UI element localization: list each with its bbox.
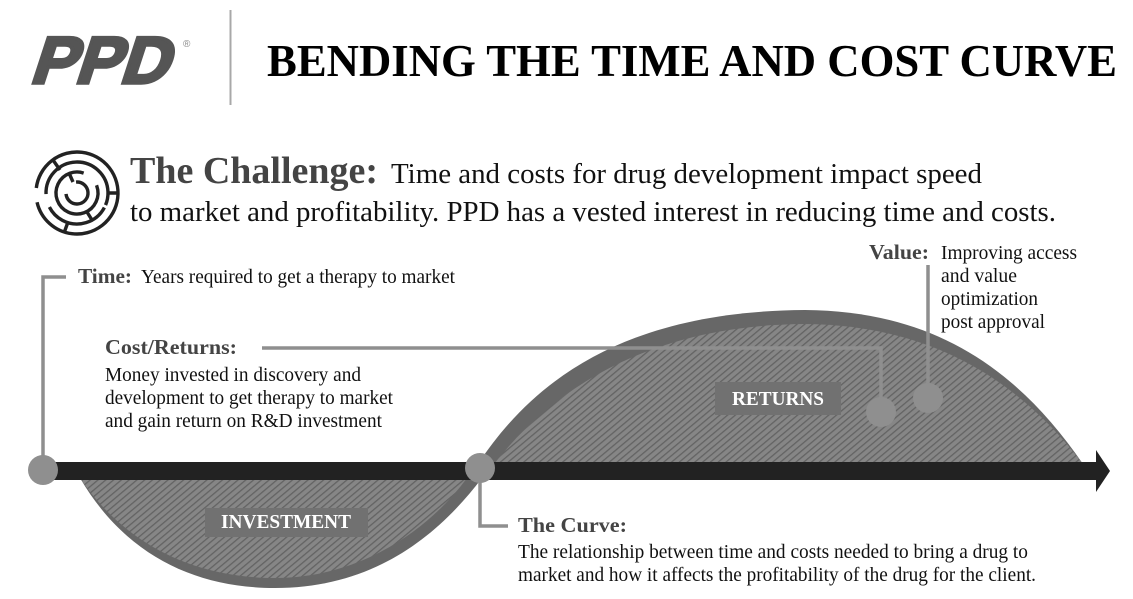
callout: value: and value (941, 266, 1017, 287)
investment label (205, 508, 368, 537)
callout: time: Time: (78, 264, 132, 288)
investment curve (80, 478, 482, 588)
logo: PPD: ® (183, 39, 191, 50)
challenge text (130, 150, 1056, 228)
callout: value (869, 240, 1077, 413)
callout: the curve: The relationship between time and costs needed to bring a drug to (518, 542, 1028, 563)
challenge text: to market and profitability. PPD has a vested interest in reducing time and costs. (130, 196, 1056, 228)
callout: cost/returns (105, 335, 896, 432)
divider (230, 10, 232, 105)
logo: PPD: PPD (24, 25, 186, 98)
challenge text: Time and costs for drug development impact speed (391, 158, 982, 190)
icon: maze (31, 147, 123, 239)
callout: time: Years required to get a therapy to market (141, 267, 456, 288)
challenge text: The Challenge: (130, 150, 378, 192)
title: BENDING THE TIME AND COST CURVE (267, 35, 1117, 86)
time axis arrow (50, 450, 1110, 492)
callout: cost/returns: Money invested in discovery and (105, 365, 361, 386)
callout: the curve: market and how it affects the profitability of the drug for the client. (518, 565, 1036, 586)
callout: cost/returns: and gain return on R&D investment (105, 411, 383, 432)
callout: value: Value: (869, 240, 929, 264)
callout: cost/returns: Cost/Returns: (105, 335, 237, 359)
investment label: INVESTMENT (221, 511, 352, 533)
callout: time (28, 264, 456, 485)
returns curve (478, 310, 1083, 464)
callout: value: post approval (941, 312, 1046, 333)
returns label (715, 382, 841, 415)
callout: the curve (465, 453, 1036, 586)
returns label: RETURNS (732, 388, 824, 410)
callout: value: Improving access (941, 243, 1077, 264)
callout: value: optimization (941, 289, 1038, 310)
callout: the curve: The Curve: (518, 513, 627, 537)
callout: cost/returns: development to get therapy to market (105, 388, 394, 409)
